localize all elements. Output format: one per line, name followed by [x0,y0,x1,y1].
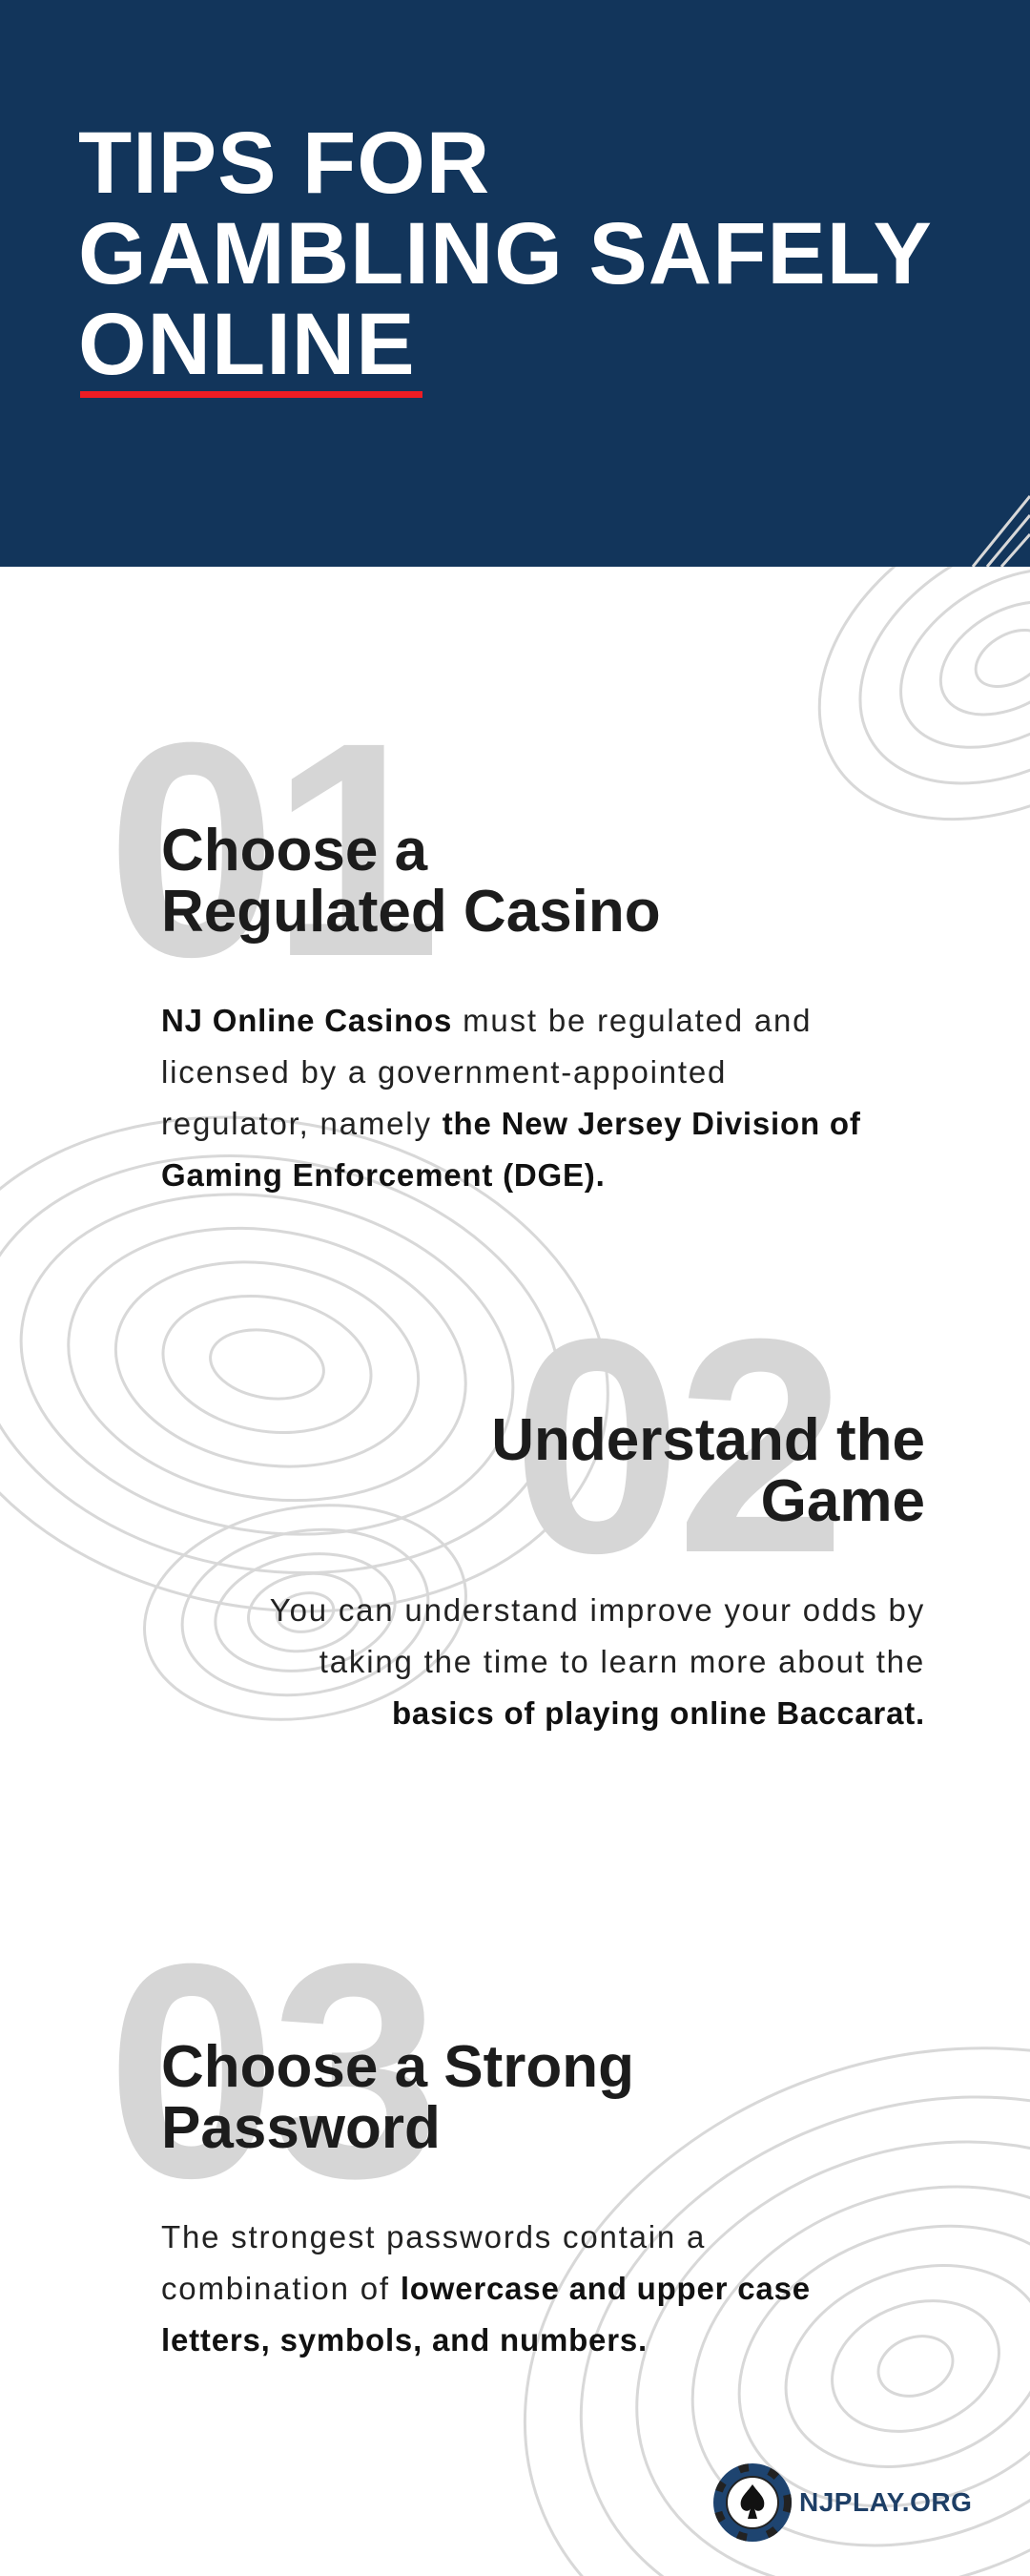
body 02 [270,1592,925,1731]
body 02: basics of playing online Baccarat. [392,1695,925,1731]
body 01: NJ Online Casinos must be regulated and [161,1003,812,1038]
body 01 [161,1003,861,1193]
title: ONLINE [78,296,416,393]
logo text: NJPLAY.ORG [799,2487,972,2517]
heading 03 [161,2034,634,2161]
body 02: taking the time to learn more about the [319,1644,925,1679]
body 03: The strongest passwords contain a [161,2219,706,2254]
heading 01: Choose a [161,818,427,883]
logo: NJPLAY.ORG [713,2463,972,2542]
section 01 [107,678,861,1193]
heading 02: Game [761,1468,925,1534]
body 03: letters, symbols, and numbers. [161,2322,648,2358]
body 01: regulator, namely the New Jersey Division of [161,1106,861,1141]
heading 03: Password [161,2095,441,2161]
title [78,114,933,393]
red underline [80,391,422,398]
number 02: 02 [512,1275,840,1616]
body 02: You can understand improve your odds by [270,1592,925,1628]
body 01: Gaming Enforcement (DGE). [161,1157,606,1193]
title: TIPS FOR [78,114,490,212]
heading 01 [161,818,661,945]
header banner [0,0,1030,567]
body 01: licensed by a government-appointed [161,1054,727,1090]
heading 01: Regulated Casino [161,879,661,945]
title: GAMBLING SAFELY [78,205,933,302]
heading 02: Understand the [491,1407,925,1473]
icon: poker chip [713,2463,792,2542]
number 03: 03 [107,1900,435,2241]
heading 03: Choose a Strong [161,2034,634,2100]
section 03 [107,1900,811,2358]
body 03 [161,2219,811,2358]
body 03: combination of lowercase and upper case [161,2271,811,2306]
section 02 [270,1275,925,1731]
heading 02 [491,1407,925,1534]
number 01: 01 [107,678,435,1020]
